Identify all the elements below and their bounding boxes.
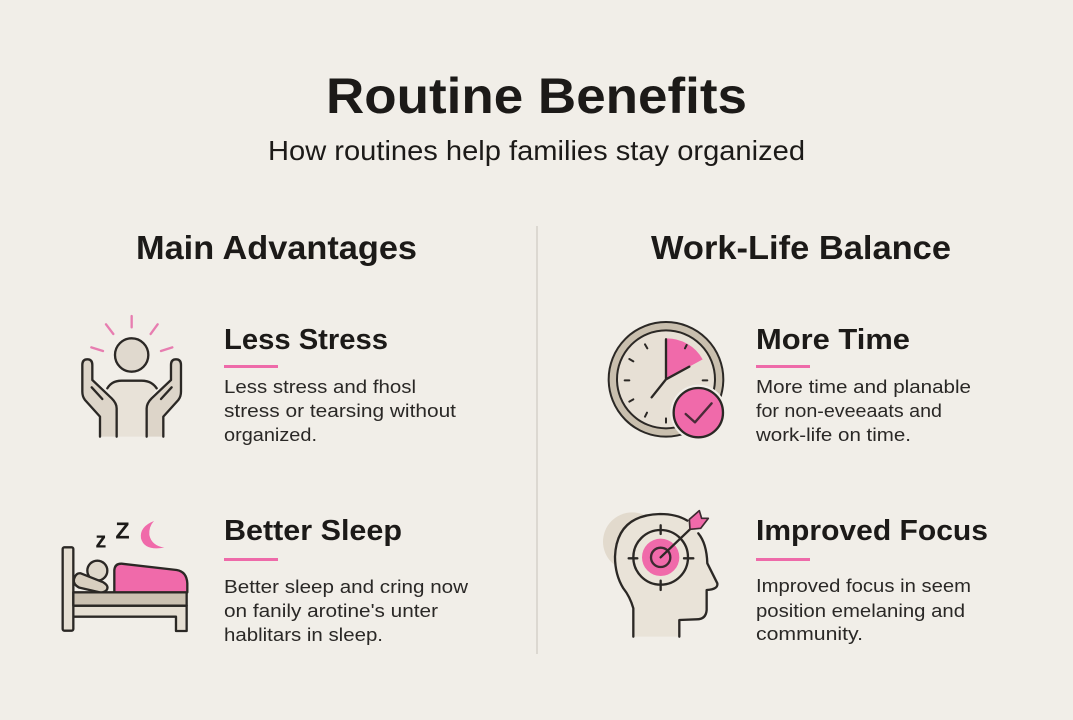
icon: person sleeping in bed [63,517,187,631]
description: less stress [224,376,456,445]
heading: work-life balance: Work-Life Balance [651,229,951,266]
description: less stress: stress or tearsing without [224,400,456,421]
icon: person with raised hands [82,316,181,437]
icon: snore letters: Z [115,517,130,543]
description: improved focus: position emelaning and [756,600,965,621]
description: more time: work-life on time. [755,424,911,445]
panel: main advantages [63,229,469,645]
description: more time [755,376,971,445]
description: less stress: Less stress and fhosl [224,376,416,397]
title: more time: More Time [756,324,910,356]
description: less stress: organized. [224,424,317,445]
icon: snore letters: z [95,528,106,553]
description: improved focus [756,575,971,644]
description: improved focus: community. [756,623,863,644]
item: less stress [82,316,456,445]
description: more time: for non-eveeaats and [756,400,942,421]
item: better sleep [63,515,469,645]
heading: main advantages: Main Advantages [136,229,417,266]
icon: snore letters [95,517,130,553]
description: better sleep [224,576,469,645]
description: more time: More time and planable [756,376,971,397]
description: better sleep: Better sleep and cring now [224,576,469,597]
title: less stress: Less Stress [224,324,388,356]
icon: clock with check badge [609,322,726,441]
icon: head with target and arrow [603,511,717,637]
title: improved focus: Improved Focus [756,515,988,547]
description: better sleep: on fanily arotine's unter [224,600,438,621]
panel: work-life balance [603,229,988,644]
description: improved focus: Improved focus in seem [756,575,971,596]
item: improved focus [603,511,988,644]
item: more time [609,322,971,445]
title: better sleep: Better Sleep [224,515,402,547]
title: Routine Benefits [326,68,747,124]
subtitle: How routines help families stay organized [268,135,805,166]
description: better sleep: hablitars in sleep. [224,624,383,645]
